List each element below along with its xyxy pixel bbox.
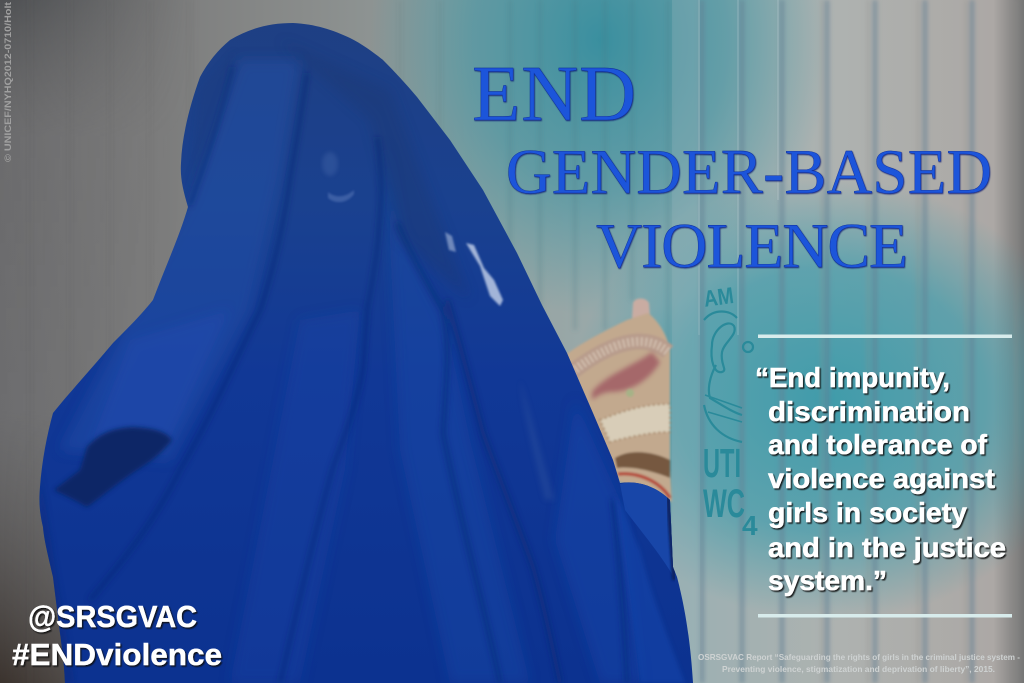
- quote text: violence against: [768, 463, 995, 494]
- quote panel: [755, 334, 1012, 618]
- fold lines: [90, 67, 627, 683]
- title: GENDER-BASED: [506, 137, 992, 207]
- hand in patterned cloth: [560, 298, 672, 502]
- quote text: and in the justice: [768, 532, 1006, 563]
- social handles: [12, 599, 222, 672]
- pocket fold: [54, 427, 172, 507]
- figure in blue veil: [0, 0, 700, 683]
- stamp printed on wall: 4: [742, 510, 758, 541]
- source citation: Preventing violence, stigmatization and deprivation of liberty”, 2015.: [722, 664, 995, 674]
- quote text: [755, 362, 1006, 596]
- credit: © UNICEF/NYHQ2012-0710/Holt: [3, 2, 13, 162]
- title: [472, 51, 992, 281]
- dust marks: [322, 152, 555, 500]
- quote text: “End impunity,: [755, 362, 950, 393]
- source citation: [698, 652, 1020, 674]
- title: END: [472, 51, 636, 138]
- quote text: girls in society: [768, 497, 968, 528]
- stamp printed on wall: [702, 282, 758, 541]
- light panels of veil: [60, 60, 640, 683]
- sleeve: [620, 482, 674, 578]
- shaded top of hood: [334, 75, 460, 285]
- stamp printed on wall: UTI: [703, 440, 741, 486]
- quote text: system.”: [768, 565, 887, 596]
- social handles: #ENDviolence: [12, 637, 222, 672]
- quote text: discrimination: [768, 396, 970, 427]
- stamp printed on wall: AM: [702, 282, 735, 312]
- social handles: @SRSGVAC: [28, 599, 197, 634]
- title: VIOLENCE: [596, 210, 908, 281]
- stamp printed on wall: WC: [703, 482, 745, 526]
- quote text: and tolerance of: [768, 429, 988, 460]
